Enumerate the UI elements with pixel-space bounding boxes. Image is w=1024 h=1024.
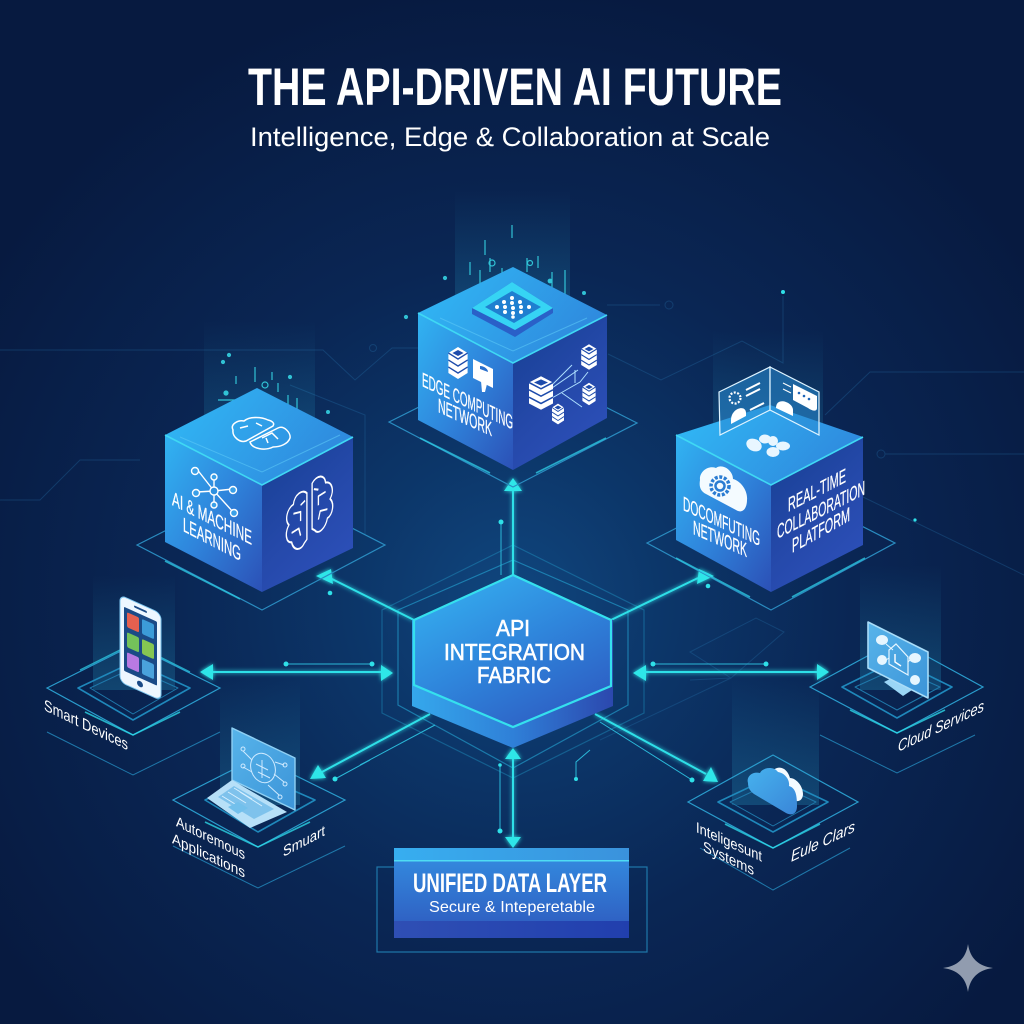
label: hub: FABRIC bbox=[477, 662, 551, 688]
label: real-time collaboration platform bbox=[777, 464, 865, 558]
cube faces bbox=[418, 267, 607, 363]
label: edge computing network bbox=[422, 369, 513, 441]
icon: smartphone bbox=[120, 595, 161, 700]
label: hub bbox=[444, 615, 585, 688]
arrow: hub to cloud services bbox=[633, 664, 829, 681]
label: intelligent systems: Inteligesunt bbox=[696, 820, 763, 866]
thin signal lines with dots bbox=[284, 290, 917, 834]
platform: autonomous applications bbox=[172, 728, 345, 888]
icon: brain on top bbox=[232, 418, 290, 449]
node: AI and machine learning cube bbox=[137, 354, 385, 610]
icon: glass collaboration panels bbox=[719, 367, 819, 435]
arrow: hub to data layer bbox=[505, 748, 521, 848]
platform rings bbox=[688, 755, 858, 890]
label: smart: Smuart bbox=[283, 823, 325, 861]
arrow: to cloud node bbox=[595, 714, 718, 782]
icon: laptop bbox=[207, 728, 295, 828]
connection arrows bbox=[200, 478, 829, 848]
icon: sparkle watermark bbox=[943, 944, 993, 992]
label: unified data layer bbox=[413, 868, 607, 916]
node: edge computing cube bbox=[389, 225, 637, 487]
label: autonomous applications: Autoremous bbox=[176, 814, 245, 864]
cube faces bbox=[676, 405, 863, 485]
light columns above nodes bbox=[93, 190, 941, 805]
arrow: to laptop bbox=[310, 714, 430, 779]
label: unified data layer: Secure & Inteperetable bbox=[429, 899, 595, 916]
label: autonomous applications: Applications bbox=[172, 831, 245, 882]
icon: processor chip bbox=[472, 282, 553, 337]
central hub: API integration fabric bbox=[412, 575, 613, 748]
icon: database bbox=[448, 347, 468, 379]
label: real-time collaboration platform: COLLABORATION bbox=[777, 476, 865, 544]
label: AI and machine learning: AI & MACHINE bbox=[172, 488, 252, 550]
label: cocomputing network bbox=[683, 493, 760, 562]
hexagon surrounding frames bbox=[382, 545, 644, 778]
icon: cloud tile bbox=[473, 359, 493, 392]
label: edge clusters: Eule Clars bbox=[791, 817, 855, 866]
label: edge computing network: NETWORK bbox=[438, 395, 492, 441]
label: unified data layer: UNIFIED DATA LAYER bbox=[413, 868, 607, 898]
icon: cloud monitor bbox=[868, 622, 928, 698]
label: hub: INTEGRATION bbox=[444, 639, 585, 665]
platform rings bbox=[173, 757, 345, 888]
label: AI and machine learning bbox=[172, 488, 252, 566]
background circuit lines bbox=[0, 296, 1024, 740]
arrow: smart devices to hub bbox=[200, 664, 393, 681]
arrow: to AI cube bbox=[316, 569, 414, 620]
icon: connected servers bbox=[529, 344, 597, 424]
node: real-time collaboration cube bbox=[647, 367, 895, 610]
icon: cloud bbox=[748, 768, 803, 814]
platform rings bbox=[47, 645, 220, 775]
label: AI and machine learning: LEARNING bbox=[183, 513, 241, 566]
base diamond bbox=[647, 480, 895, 610]
icon: cloud with gear bbox=[700, 466, 747, 511]
platform: smart devices bbox=[44, 595, 220, 775]
unified data layer panel bbox=[377, 848, 647, 952]
label: cocomputing network: DOCOMFUTING bbox=[683, 493, 760, 551]
label: intelligent systems: Systems bbox=[703, 839, 754, 879]
icon: neural network bbox=[192, 468, 238, 516]
platform: cloud services bbox=[810, 622, 984, 773]
node: edge computing cube: EDGE COMPUTING bbox=[422, 369, 513, 434]
platform: intelligent systems bbox=[688, 755, 858, 890]
label: smart devices: Smart Devices bbox=[44, 696, 128, 754]
base diamond bbox=[137, 482, 385, 610]
icon: people cluster bbox=[744, 434, 790, 457]
arrow: to collaboration cube bbox=[611, 569, 714, 620]
base diamond bbox=[389, 360, 637, 487]
data particles bbox=[404, 225, 585, 318]
label: real-time collaboration platform: PLATFORM bbox=[792, 503, 850, 558]
label: cocomputing network: NETWORK bbox=[693, 517, 747, 562]
title: THE API-DRIVEN AI FUTURE bbox=[248, 58, 782, 117]
label: autonomous applications bbox=[172, 814, 245, 882]
label: hub: API bbox=[496, 615, 530, 641]
platform rings bbox=[810, 640, 983, 773]
subtitle: Intelligence, Edge & Collaboration at Scale bbox=[250, 122, 770, 152]
cube faces bbox=[165, 388, 353, 485]
label: real-time collaboration platform: REAL-TIME bbox=[788, 464, 846, 517]
arrow: up to edge computing cube bbox=[504, 478, 522, 575]
data particles bbox=[218, 354, 329, 413]
label: cloud services: Cloud Services bbox=[898, 696, 984, 756]
icon: brain on side bbox=[286, 471, 333, 554]
